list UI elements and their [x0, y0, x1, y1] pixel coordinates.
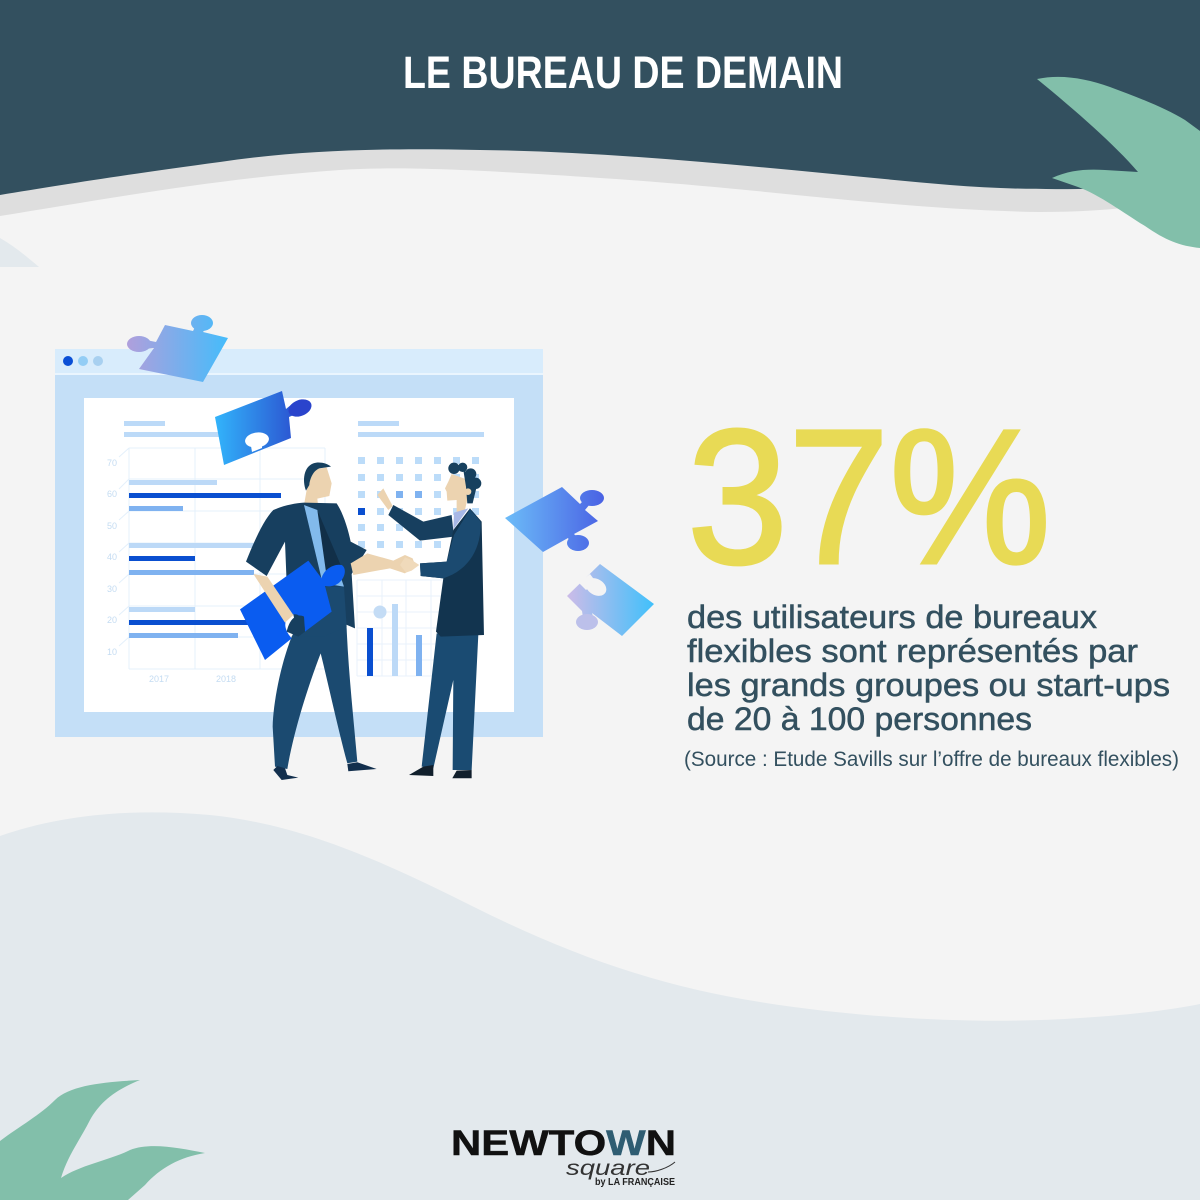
bottom wave [0, 812, 1200, 1200]
right man sleeve [420, 509, 481, 578]
left man legs [273, 583, 357, 769]
illustration: browser window with charts [55, 349, 543, 737]
man left [240, 463, 415, 780]
description text: de 20 à 100 personnes [687, 701, 1032, 737]
right man jacket [420, 508, 484, 637]
horizontal bar chart: 60 [107, 489, 117, 499]
left man jacket [246, 503, 367, 630]
logo script: square [566, 1157, 650, 1180]
right man face and raised hand [377, 474, 469, 515]
description text: flexibles sont représentés par [687, 633, 1138, 669]
description text: des utilisateurs de bureaux [687, 599, 1097, 635]
right man hair [448, 463, 481, 503]
left man neck and face [304, 467, 332, 507]
left man hair [304, 463, 331, 491]
puzzle piece: right lilac [567, 564, 654, 636]
right man hand [400, 557, 419, 573]
horizontal bar chart: 40 [107, 552, 117, 562]
leaf: top right [1037, 77, 1200, 248]
right man ear [465, 488, 471, 495]
small wave: left edge [0, 238, 39, 267]
window content sheet [84, 398, 514, 712]
logo [451, 1124, 676, 1188]
big percentage: 37% [687, 389, 1051, 604]
vertical bar chart [357, 580, 450, 676]
header dark band [0, 0, 1200, 195]
left man tie [317, 510, 341, 577]
left man arm [253, 574, 293, 623]
horizontal bar chart: 50 [107, 521, 117, 531]
right man legs [422, 633, 478, 770]
horizontal bar chart: 30 [107, 584, 117, 594]
header grey band [0, 150, 1200, 216]
puzzle held by man [240, 561, 345, 660]
horizontal bar chart: 2017 [149, 674, 169, 684]
horizontal bar chart: 10 [107, 647, 117, 657]
title: LE BUREAU DE DEMAIN [403, 47, 843, 98]
right man raised arm [388, 505, 454, 541]
right chart headings [358, 421, 484, 437]
left man forearm [351, 553, 415, 575]
window control dots [63, 356, 103, 366]
description text [687, 599, 1170, 737]
puzzle piece: blue over window [215, 391, 314, 465]
left man waist [300, 587, 347, 637]
left chart headings [124, 421, 220, 437]
left man shoes [273, 762, 377, 780]
dot matrix chart [358, 457, 479, 548]
illustration: two businessmen shaking hands [240, 463, 484, 780]
man right [377, 463, 484, 778]
left man shirt [304, 505, 344, 587]
right man collar [453, 508, 468, 529]
window frame [55, 349, 543, 737]
horizontal bar chart [107, 448, 325, 684]
description text: les grands groupes ou start-ups [687, 667, 1170, 703]
logo wordmark: NEWTO WN [451, 1124, 676, 1163]
puzzle piece: right blue [505, 487, 604, 552]
source note: (Source : Etude Savills sur l’offre de bureaux flexibles) [684, 748, 1179, 771]
right man shoes [409, 765, 472, 778]
puzzle piece: top lilac [127, 315, 228, 382]
horizontal bar chart: 70 [107, 458, 117, 468]
horizontal bar chart: 2018 [216, 674, 236, 684]
window title bar [55, 349, 543, 373]
logo tagline: by LA FRANÇAISE [595, 1176, 675, 1188]
horizontal bar chart: 20 [107, 615, 117, 625]
leaf: bottom left [0, 1080, 205, 1200]
